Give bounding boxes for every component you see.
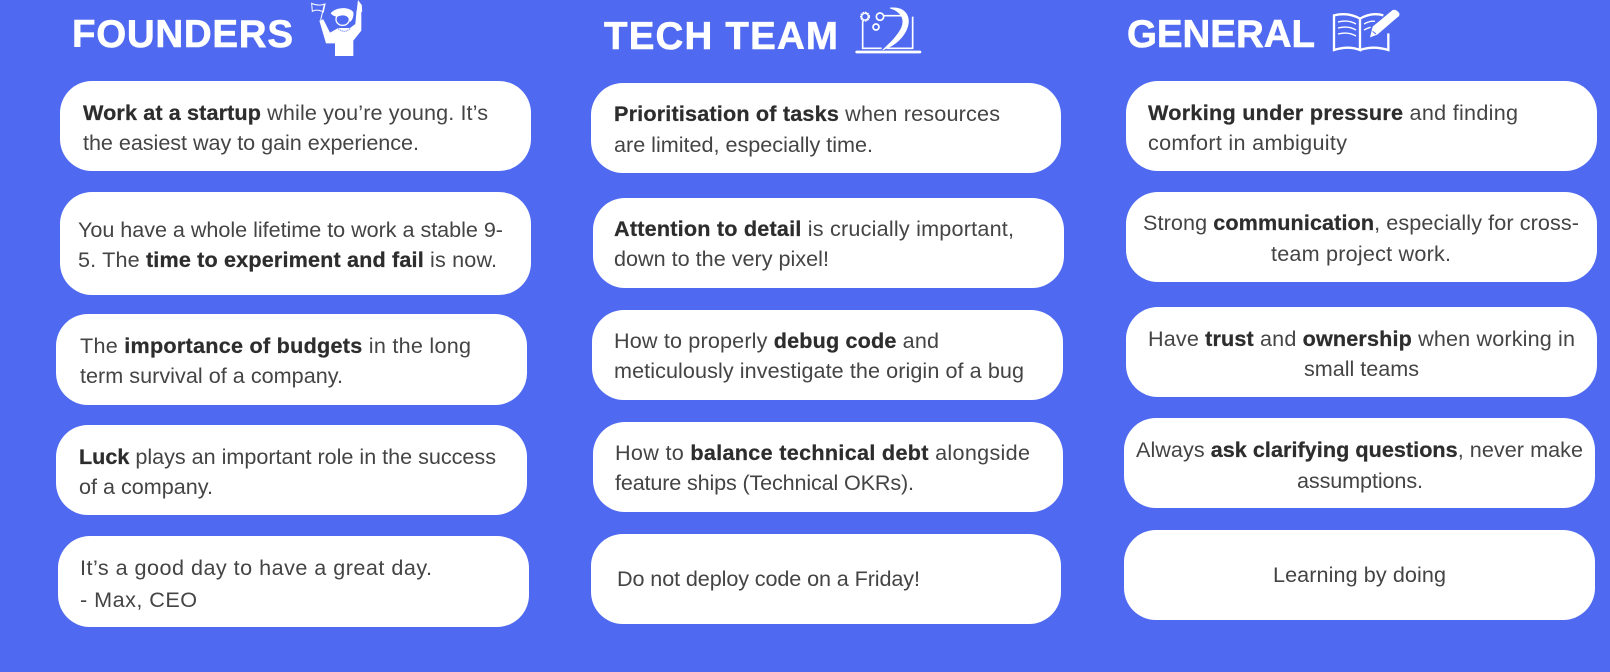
card: ask clarifying questions: assumptions. — [1297, 468, 1423, 493]
card: debug code: meticulously investigate the origin of a bug — [614, 358, 1024, 383]
card: technical debt: How to balance technical debt alongside — [615, 440, 1030, 465]
card: working under pressure: Working under pressure and finding — [1148, 100, 1518, 125]
card: friday deploys — [591, 534, 1061, 624]
card: ask clarifying questions — [1124, 418, 1595, 508]
card: working under pressure — [1126, 81, 1597, 171]
card: debug code: How to properly debug code and — [614, 328, 939, 353]
icon: laptop with gears — [857, 8, 920, 52]
card: strong communication: team project work. — [1271, 241, 1451, 266]
card: work at a startup — [60, 81, 531, 171]
card: strong communication: Strong communication, especially for cross- — [1143, 210, 1579, 235]
icon: open book with pencil — [1334, 10, 1399, 50]
card: prioritisation of tasks: Prioritisation of tasks when resources — [614, 101, 1000, 126]
card: technical debt — [593, 422, 1063, 512]
heading: founders: FOUNDERS — [72, 13, 293, 56]
panel: founders column — [56, 1, 531, 627]
icon: person waving flag — [312, 1, 362, 56]
card: time to experiment and fail: 5. The time to experiment and fail is now. — [78, 247, 497, 272]
card: CEO quote — [58, 536, 529, 627]
card: importance of budgets — [56, 314, 527, 405]
heading: tech team: TECH TEAM — [604, 15, 838, 58]
card: attention to detail: Attention to detail is crucially important, — [614, 216, 1014, 241]
panel: general column — [1124, 10, 1597, 620]
card: trust and ownership: Have trust and ownership when working in — [1148, 326, 1575, 351]
panel: tech team column — [591, 8, 1064, 624]
card: trust and ownership — [1126, 307, 1597, 397]
card: work at a startup: Work at a startup while you’re young. It’s — [83, 100, 488, 125]
card: ask clarifying questions: Always ask clarifying questions, never make — [1136, 437, 1583, 462]
card: CEO quote: - Max, CEO — [80, 587, 197, 612]
card: CEO quote: It’s a good day to have a great day. — [80, 555, 432, 580]
card: luck: of a company. — [79, 474, 213, 499]
card: technical debt: feature ships (Technical OKRs). — [615, 470, 914, 495]
card: time to experiment and fail — [60, 192, 531, 295]
card: prioritisation of tasks — [591, 83, 1061, 173]
card: work at a startup: the easiest way to gain experience. — [83, 130, 419, 155]
card: working under pressure: comfort in ambiguity — [1148, 130, 1347, 155]
card: importance of budgets: The importance of budgets in the long — [80, 333, 471, 358]
card: luck — [56, 425, 527, 515]
card: learning by doing: Learning by doing — [1273, 562, 1446, 587]
card: debug code — [592, 310, 1063, 400]
card: importance of budgets: term survival of a company. — [80, 363, 343, 388]
card: trust and ownership: small teams — [1304, 356, 1419, 381]
card: luck: Luck plays an important role in the success — [79, 444, 496, 469]
card: time to experiment and fail: You have a whole lifetime to work a stable 9- — [78, 217, 503, 242]
card: prioritisation of tasks: are limited, especially time. — [614, 132, 873, 157]
card: learning by doing — [1124, 530, 1595, 620]
heading: general: GENERAL — [1127, 13, 1315, 56]
card: attention to detail — [593, 198, 1064, 288]
card: strong communication — [1126, 192, 1597, 282]
card: attention to detail: down to the very pixel! — [614, 246, 829, 271]
card: friday deploys: Do not deploy code on a Friday! — [617, 566, 920, 591]
